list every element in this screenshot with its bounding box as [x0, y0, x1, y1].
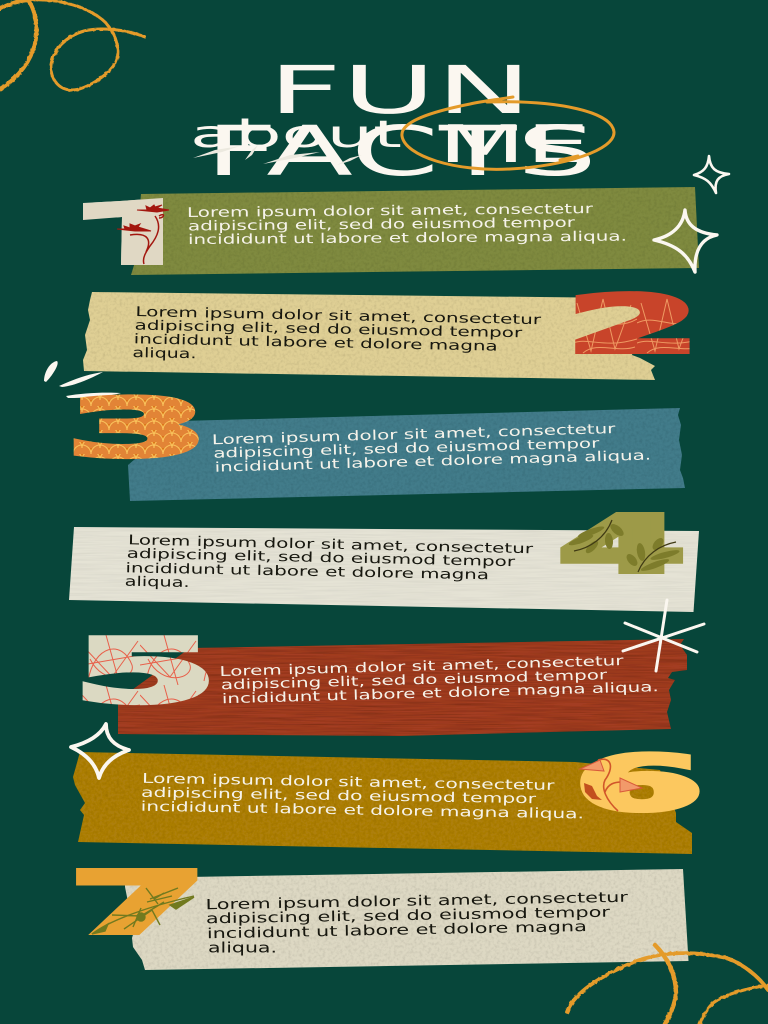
text lines: [125, 533, 534, 591]
number 7: 7: [70, 854, 206, 952]
number 3: 3: [66, 382, 208, 474]
scribble under about: [193, 145, 362, 165]
number 6: [575, 740, 703, 828]
text lines: Lorem ipsum dolor sit amet, consectetur: [187, 202, 594, 221]
text lines: [212, 422, 651, 476]
text lines: adipiscing elit, sed do eiusmod tempor: [213, 437, 600, 462]
number 2: 2: [566, 280, 700, 370]
title: FUN: FUN: [268, 52, 532, 129]
title: [190, 52, 597, 192]
panel 3: blue strip: [66, 382, 685, 501]
text lines: incididunt ut labore et dolore magna: [134, 332, 498, 355]
text lines: Lorem ipsum dolor sit amet, consectetur: [135, 305, 542, 328]
number 7: [70, 854, 206, 952]
panel 2: tan strip: [83, 280, 700, 380]
text lines: adipiscing elit, sed do eiusmod tempor: [206, 905, 610, 927]
decoration: bottom-right orange scribble: [567, 945, 768, 1024]
text lines: adipiscing elit, sed do eiusmod tempor: [221, 668, 608, 693]
strip: [131, 187, 699, 275]
text lines: incididunt ut labore et dolore magna aliqua.: [188, 230, 627, 248]
number 1: [83, 198, 170, 265]
flowers: [117, 205, 169, 264]
text lines: incididunt ut labore et dolore magna aliqua.: [214, 449, 651, 476]
title: about: about: [190, 113, 402, 156]
text lines: Lorem ipsum dolor sit amet, consectetur: [212, 422, 616, 448]
panel 4: off-white strip: [69, 501, 699, 612]
text lines: Lorem ipsum dolor sit amet, consectetur: [205, 890, 628, 913]
title oval: [402, 97, 614, 169]
accent dashes near number 3: [44, 361, 121, 398]
asterisk sparkle: [623, 600, 704, 671]
text lines: [205, 890, 628, 957]
sparkle: small top right: [694, 156, 729, 193]
sprigs: [92, 888, 194, 934]
number 4: [559, 501, 684, 590]
number 5: 5: [72, 620, 218, 722]
text lines: [141, 772, 584, 822]
strip: [125, 869, 688, 970]
strip: [69, 527, 699, 612]
number 4: 4: [559, 501, 684, 590]
text lines: incididunt ut labore et dolore magna: [125, 561, 489, 583]
title: FACTS: FACTS: [205, 112, 597, 192]
text lines: aliqua.: [132, 346, 197, 362]
text lines: incididunt ut labore et dolore magna aliqua.: [141, 800, 584, 822]
strip: [118, 639, 687, 736]
text lines: Lorem ipsum dolor sit amet, consectetur: [219, 654, 624, 680]
text lines: Lorem ipsum dolor sit amet, consectetur: [142, 772, 555, 794]
text lines: adipiscing elit, sed do eiusmod tempor: [127, 547, 516, 570]
text lines: incididunt ut labore et dolore magna: [207, 919, 587, 942]
decoration: top-left orange scribble: [0, 0, 145, 90]
text lines: [132, 305, 542, 362]
number 1: 1: [76, 179, 176, 291]
panel 6: mustard strip: [73, 740, 703, 854]
panel 7: beige strip: [70, 854, 688, 970]
panel 5: red strip: [72, 620, 687, 736]
text lines: [187, 202, 627, 248]
panel 1: olive strip: [83, 187, 699, 275]
text lines: aliqua.: [208, 941, 277, 957]
strip: [83, 292, 655, 380]
strip: [73, 752, 692, 854]
text lines: Lorem ipsum dolor sit amet, consectetur: [128, 533, 534, 557]
number 6: 6: [575, 740, 703, 828]
sparkle: large right of panel 1: [654, 210, 717, 272]
text lines: adipiscing elit, sed do eiusmod tempor: [188, 216, 576, 234]
text lines: aliqua.: [125, 575, 190, 591]
title: ME: ME: [438, 115, 590, 175]
text lines: [219, 654, 659, 707]
strip: [128, 408, 685, 501]
flowers: [580, 759, 642, 811]
text lines: incididunt ut labore et dolore magna aliqua.: [222, 680, 659, 707]
leaves: [568, 522, 680, 573]
text lines: adipiscing elit, sed do eiusmod tempor: [134, 319, 523, 341]
sparkle: left of panel 6: [71, 724, 129, 778]
text lines: adipiscing elit, sed do eiusmod tempor: [141, 786, 537, 807]
